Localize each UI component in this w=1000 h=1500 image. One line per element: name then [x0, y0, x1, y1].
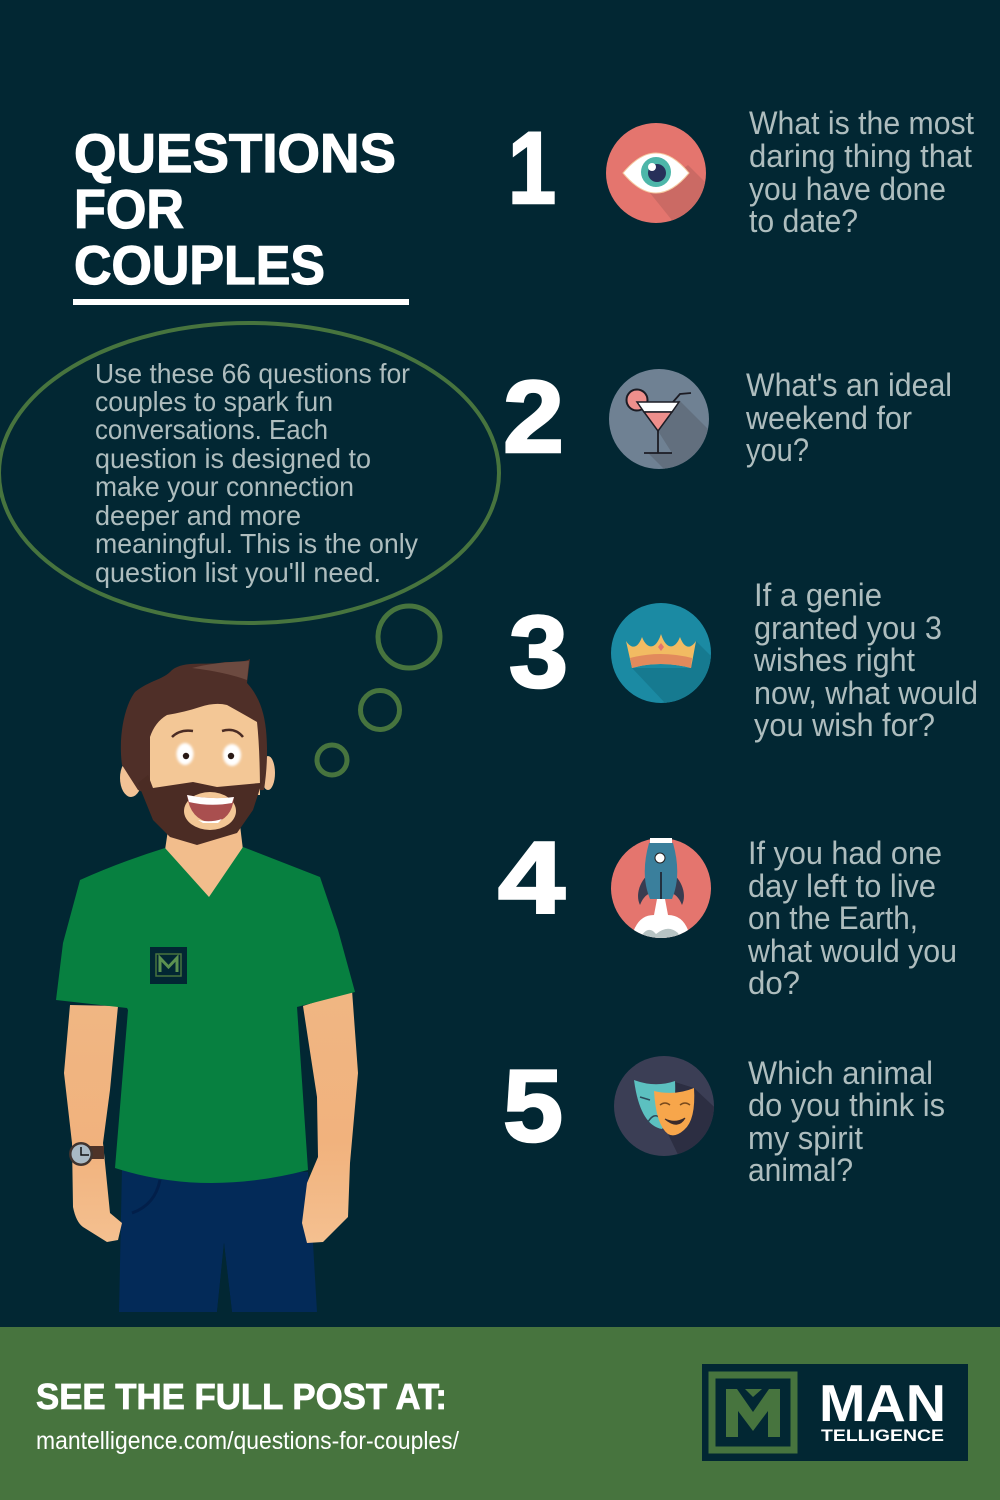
- question 3: [753, 577, 978, 743]
- icon: theatre masks: [614, 1056, 714, 1156]
- question 3: now, what would: [754, 675, 978, 711]
- question 3: wishes right: [753, 642, 915, 678]
- intro text: [95, 358, 418, 588]
- intro text: meaningful. This is the only: [95, 528, 418, 559]
- question 2: What's an ideal: [746, 367, 952, 403]
- beard: [138, 773, 265, 845]
- logo: TELLIGENCE: [821, 1426, 944, 1445]
- item 1: [512, 110, 974, 232]
- question 2: [745, 367, 952, 468]
- question 1: [749, 105, 974, 239]
- question 1: you have done: [749, 171, 946, 207]
- question 1: What is the most: [749, 105, 974, 141]
- logo: MAN: [819, 1375, 946, 1433]
- eyes: [176, 743, 241, 766]
- character: smiling bearded man: [56, 659, 358, 1312]
- footer band: [0, 1327, 1000, 1500]
- trousers: [119, 1168, 317, 1312]
- question 4: do?: [748, 965, 800, 1001]
- question 5: my spirit: [748, 1120, 863, 1156]
- title: COUPLES: [74, 234, 325, 296]
- ears: [120, 756, 275, 797]
- intro text: deeper and more: [95, 500, 301, 531]
- neck: [165, 825, 243, 898]
- logo: [702, 1364, 968, 1461]
- icon: eye: [606, 123, 706, 223]
- face: [150, 704, 260, 795]
- question 2: weekend for: [745, 400, 912, 436]
- icon: rocket: [611, 838, 711, 945]
- shirt: [56, 847, 355, 1183]
- right arm: [302, 990, 358, 1243]
- left arm: [64, 1005, 122, 1242]
- title: [73, 122, 409, 305]
- intro text: question is designed to: [95, 443, 371, 474]
- footer url: mantelligence.com/questions-for-couples/: [36, 1427, 459, 1455]
- question 4: day left to live: [748, 868, 936, 904]
- title: FOR: [74, 178, 184, 240]
- intro text: make your connection: [95, 471, 354, 502]
- item 4: [498, 838, 955, 994]
- question 5: do you think is: [748, 1087, 945, 1123]
- intro text: question list you'll need.: [95, 557, 381, 588]
- number 1: 1: [508, 111, 556, 225]
- question 5: [748, 1055, 945, 1188]
- number 5: 5: [503, 1049, 563, 1163]
- icon: crown: [611, 603, 711, 703]
- shirt badge: [150, 947, 187, 984]
- hair: [121, 659, 267, 795]
- question 1: daring thing that: [749, 138, 972, 174]
- question 4: on the Earth,: [748, 900, 918, 936]
- question 5: animal?: [748, 1152, 853, 1188]
- question 4: [747, 835, 957, 1001]
- thought bubble: [0, 323, 499, 775]
- title: QUESTIONS: [74, 122, 396, 184]
- mouth: [184, 792, 236, 830]
- question 3: you wish for?: [754, 707, 935, 743]
- intro text: conversations. Each: [95, 414, 328, 445]
- question 3: If a genie: [754, 577, 882, 613]
- number 3: 3: [509, 595, 568, 709]
- item 2: [505, 369, 950, 469]
- intro text: couples to spark fun: [95, 386, 333, 417]
- footer call to action: SEE THE FULL POST AT:: [36, 1376, 447, 1417]
- question 2: you?: [746, 432, 809, 468]
- question 4: what would you: [747, 933, 957, 969]
- question 1: to date?: [749, 203, 858, 239]
- question 5: Which animal: [748, 1055, 933, 1091]
- item 3: [509, 577, 978, 743]
- question 3: granted you 3: [754, 610, 942, 646]
- watch: [69, 1142, 104, 1166]
- item 5: [504, 1056, 944, 1182]
- number 4: 4: [498, 821, 565, 935]
- question 4: If you had one: [748, 835, 942, 871]
- intro text: Use these 66 questions for: [95, 358, 410, 389]
- icon: cocktail: [609, 369, 709, 469]
- eyebrows: [172, 730, 243, 737]
- number 2: 2: [503, 360, 564, 474]
